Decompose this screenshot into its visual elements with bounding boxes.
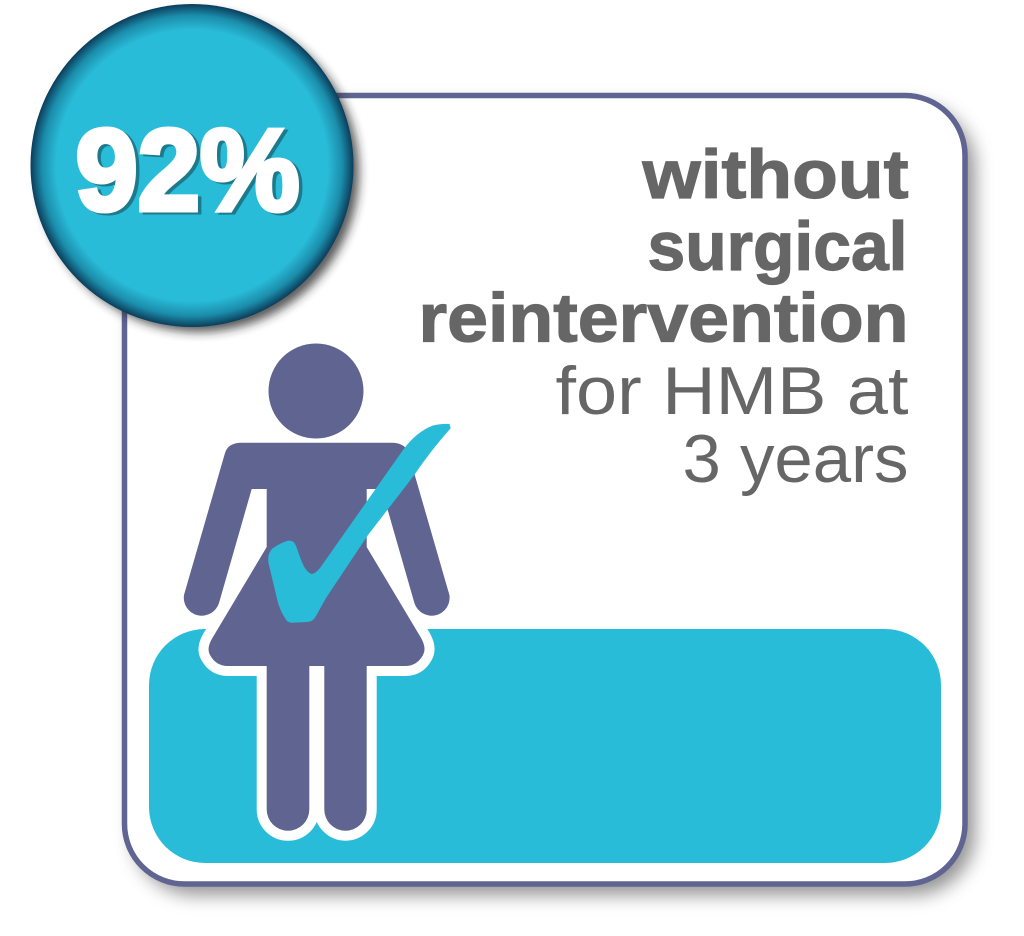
- heading: without surgical reintervention: without: [641, 136, 909, 213]
- text: for HMB at 3 years: for HMB at: [556, 353, 909, 429]
- icon: woman figure: [184, 344, 450, 831]
- heading: without surgical reintervention: [418, 136, 909, 356]
- panel: card: [124, 96, 975, 895]
- badge: 92%: [30, 4, 359, 332]
- heading: without surgical reintervention: reintervention: [418, 280, 908, 356]
- text: for HMB at 3 years: 3 years: [682, 421, 908, 497]
- badge: 92%: 92%: [79, 107, 303, 237]
- heading: without surgical reintervention: surgical: [648, 208, 908, 285]
- text: for HMB at 3 years: [556, 353, 909, 497]
- head: [268, 344, 364, 438]
- badge: 92%: 92%: [76, 105, 300, 235]
- figure white outline and body: [184, 443, 450, 831]
- panel: teal bench: [149, 629, 941, 863]
- icon: check mark: [268, 424, 451, 623]
